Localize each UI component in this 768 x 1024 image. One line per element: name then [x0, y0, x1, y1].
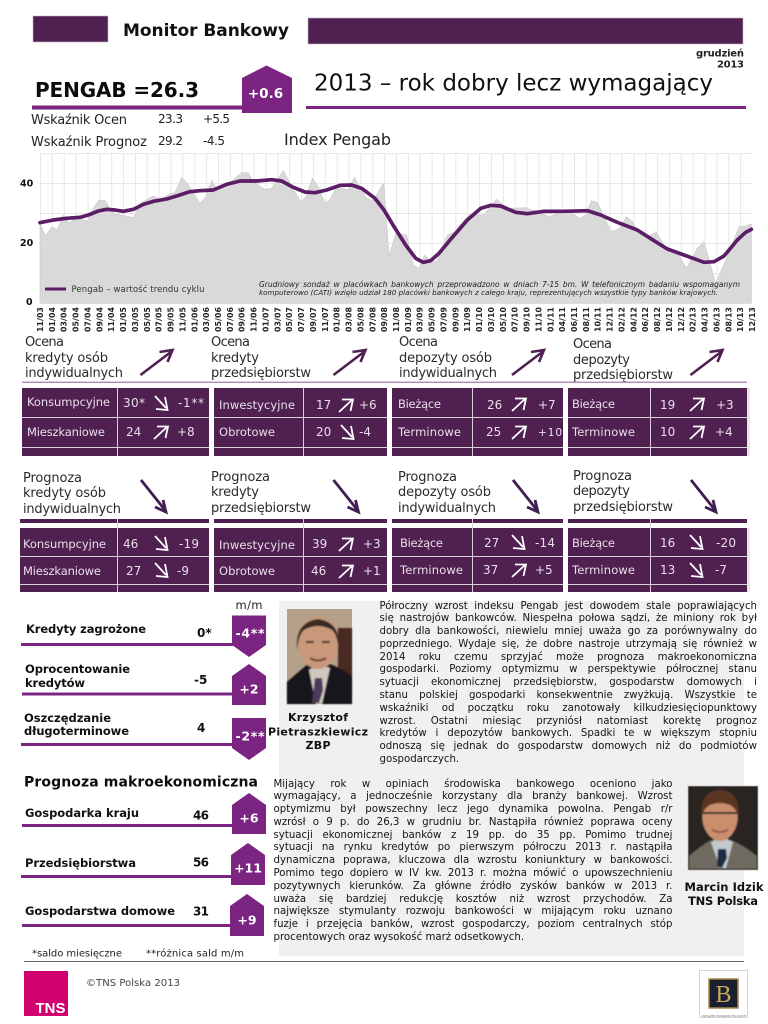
logo: Związek Banków Polskich: ZWIĄZEK BANKÓW POLSKICH: [702, 1013, 746, 1018]
commentary text: ZBP: poprzedniego. Wydaje się, że dobre nastroje utrzymają się również w: [380, 639, 757, 650]
heading: Ocena depozyty przedsiębiorstw: Ocena: [573, 337, 612, 352]
heading: Ocena depozyty osób indywidualnych: depozyty osób: [399, 351, 492, 366]
x axis labels: 01/05: [119, 307, 128, 332]
label: m/m: m/m: [236, 598, 262, 612]
sub-indicators table: 29.2: [158, 134, 183, 148]
table: ocena depozyty osób: 26: [487, 398, 502, 412]
commentary text: ZBP: się nastrojów bankowców. Niespełna połowa sądzi, że miniony rok był: [380, 613, 757, 624]
heading: Prognoza kredyty osób indywidualnych: [23, 471, 121, 517]
x axis labels: 11/08: [392, 307, 401, 332]
survey note: komputerowo (CATI) wzięło udział 180 placówki bankowych z całego kraju, reprezentujących wszystkie typy banków krajowych.: [259, 288, 718, 297]
table: prognoza depozyty przedsiębiorstw: -7: [715, 563, 727, 577]
indicator: Oszczędzanie długoterminowe: długoterminowe: [24, 724, 129, 738]
table: ocena depozyty osób: [392, 388, 563, 456]
x axis labels: 03/07: [273, 307, 282, 332]
heading: Prognoza depozyty osób indywidualnych: [398, 470, 496, 516]
commentary text: TNS: optymizmu był powszechny lecz jego dynamika powolna. Pengab r/r: [274, 804, 672, 815]
copyright: ©TNS Polska 2013: [86, 978, 180, 989]
x axis labels: 10/12: [665, 307, 674, 332]
table: ocena kredyty osób: Konsumpcyjne: [27, 395, 110, 409]
indicator: Przedsiębiorstwa: Przedsiębiorstwa: [25, 856, 136, 870]
commentary text: TNS: procentowych oraz wysokość marż odsetkowych.: [274, 932, 524, 943]
table: ocena depozyty przedsiębiorstw: Terminowe: [571, 425, 635, 439]
table: ocena kredyty przedsiębiorstw: 20: [316, 425, 331, 439]
indicator: Oszczędzanie długoterminowe: Oszczędzanie: [24, 711, 111, 725]
heading: Prognoza kredyty osób indywidualnych: indywidualnych: [23, 502, 121, 517]
heading: Prognoza depozyty przedsiębiorstw: Prognoza: [573, 469, 632, 484]
heading: Ocena kredyty osób indywidualnych: kredyty osób: [25, 351, 108, 366]
x axis labels: 03/05: [131, 307, 140, 332]
photo: Krzysztof Pietraszkiewicz: [287, 609, 352, 704]
x axis labels: 04/13: [700, 307, 710, 332]
x axis labels: 09/04: [95, 306, 104, 332]
commentary text: ZBP: 2014 roku czemu sprzyjać może prognoza makroekonomiczna: [380, 652, 757, 663]
x axis labels: 01/04: [48, 306, 57, 332]
heading: Prognoza depozyty osób indywidualnych: depozyty osób: [398, 485, 491, 500]
table: prognoza kredyty przedsiębiorstw: Inwestycyjne: [219, 538, 295, 552]
heading: Prognoza kredyty przedsiębiorstw: kredyty: [211, 485, 259, 500]
commentary text: ZBP: odnoszą się jednak do gospodarstw domowych niż do podmiotów: [380, 741, 757, 752]
x axis labels: 03/10: [487, 306, 496, 332]
x axis labels: 01/07: [262, 307, 270, 332]
x axis labels: 06/11: [570, 307, 579, 332]
table: prognoza kredyty przedsiębiorstw: 39: [312, 537, 327, 551]
indicator: Oprocentowanie kredytów: kredytów: [25, 676, 85, 690]
commentary text: TNS: Mijający rok w opiniach środowiska bankowego oceniono jako: [274, 778, 672, 790]
heading: Prognoza kredyty przedsiębiorstw: przedsiębiorstw: [211, 501, 311, 516]
table: prognoza depozyty osób: Terminowe: [399, 563, 463, 577]
indicator: Oprocentowanie kredytów: -5: [194, 673, 207, 687]
heading: Ocena depozyty przedsiębiorstw: depozyty: [573, 353, 630, 368]
heading: Prognoza depozyty przedsiębiorstw: [573, 469, 673, 515]
x axis labels: 11/07: [321, 307, 330, 332]
sub-indicators table: +5.5: [203, 112, 230, 126]
table: ocena kredyty osób: -1**: [178, 396, 204, 410]
indicator: Gospodarka kraju: 46: [193, 808, 209, 822]
commentary text: ZBP: wskaźniki od początku roku zanotowały kilkudziesięciopunktowy: [380, 703, 757, 714]
table: prognoza kredyty przedsiębiorstw: +3: [363, 537, 381, 551]
indicator: Gospodarka kraju: Gospodarka kraju: [25, 806, 139, 820]
heading: Prognoza kredyty osób indywidualnych: Prognoza: [23, 471, 82, 486]
table: prognoza kredyty osób: Mieszkaniowe: [23, 564, 101, 578]
badge: PENGAB change +0.6: [242, 66, 292, 113]
table: ocena depozyty przedsiębiorstw: 10: [660, 425, 675, 439]
table: prognoza kredyty przedsiębiorstw: 46: [311, 564, 326, 578]
x axis labels: 04/12: [629, 307, 638, 332]
indicator: Gospodarka kraju: [22, 793, 266, 834]
table: prognoza depozyty osób: -14: [535, 536, 555, 550]
x axis labels: 09/06: [238, 307, 247, 332]
x axis labels: 03/06: [202, 307, 211, 332]
heading: Ocena depozyty przedsiębiorstw: [573, 337, 673, 383]
chart heading: Index Pengab: [284, 130, 391, 149]
caption: Marcin Idzik TNS Polska: Marcin Idzik: [684, 880, 764, 894]
heading: Prognoza depozyty osób indywidualnych: indywidualnych: [398, 501, 496, 516]
commentary text: TNS: największe stymulanty rozwoju bankowości w mijającym roku uznano: [274, 906, 672, 917]
commentary text: ZBP: sytuacji ekonomicznej przedsiębiorstw, gospodarstw domowych i: [380, 677, 757, 688]
x axis labels: 07/05: [155, 307, 164, 332]
indicator: Gospodarka kraju: +6: [239, 810, 259, 826]
x axis labels: 06/12: [641, 307, 650, 332]
trend line: [40, 180, 751, 262]
table: prognoza kredyty osób: -9: [177, 564, 189, 578]
x axis labels: [36, 306, 757, 332]
x axis labels: 05/06: [214, 307, 223, 332]
indicator: Oprocentowanie kredytów: Oprocentowanie: [25, 662, 130, 676]
table: ocena depozyty przedsiębiorstw: +4: [715, 425, 733, 439]
table: prognoza depozyty przedsiębiorstw: 16: [660, 536, 675, 550]
arrow up: depozyty osób: [512, 350, 544, 375]
x axis labels: 05/10: [499, 306, 508, 332]
table: prognoza kredyty osób: 46: [123, 537, 138, 551]
heading: Ocena depozyty przedsiębiorstw: przedsiębiorstw: [573, 368, 673, 383]
x axis labels: 11/05: [178, 307, 187, 332]
x axis labels: 04/11: [558, 307, 567, 332]
indicator: Kredyty zagrożone: Kredyty zagrożone: [26, 622, 146, 636]
indicator: Przedsiębiorstwa: +11: [234, 860, 262, 876]
table: ocena kredyty osób: Mieszkaniowe: [27, 425, 105, 439]
sub-indicators table: -4.5: [203, 134, 225, 148]
indicator: Gospodarstwa domowe: [22, 894, 264, 936]
table: ocena kredyty przedsiębiorstw: [214, 388, 387, 456]
heading: Ocena kredyty przedsiębiorstw: kredyty: [211, 351, 259, 366]
table: ocena depozyty osób: Terminowe: [397, 425, 461, 439]
x axis labels: 05/07: [285, 307, 294, 332]
sub-indicators table: Wskaźnik Ocen: [31, 113, 127, 128]
table: ocena kredyty przedsiębiorstw: 17: [316, 398, 331, 412]
logo: TNS: [24, 971, 68, 1017]
heading: Ocena depozyty osób indywidualnych: Ocena: [399, 335, 438, 350]
arrow down: depozyty osób: [513, 480, 538, 512]
table: prognoza depozyty przedsiębiorstw: Bieżące: [572, 536, 615, 550]
table: prognoza kredyty przedsiębiorstw: [214, 519, 387, 592]
indicator: Oszczędzanie długoterminowe: [21, 711, 266, 760]
x axis labels: 03/09: [416, 307, 425, 332]
heading: Prognoza kredyty przedsiębiorstw: Prognoza: [211, 470, 270, 485]
heading: Prognoza depozyty przedsiębiorstw: depozyty: [573, 484, 630, 499]
commentary text: ZBP: stanu polskiej gospodarki konsekwentnie zwyżkują. Wszystkie te: [380, 690, 757, 701]
commentary text: TNS: dynamiczna poprawa, kluczowa dla wzrostu koniunktury w bankowości.: [274, 855, 672, 866]
x axis labels: 05/08: [356, 307, 365, 332]
photo: Marcin Idzik: [688, 786, 758, 870]
x axis labels: 01/06: [190, 307, 199, 332]
table: prognoza depozyty osób: [392, 519, 563, 592]
header title: Monitor Bankowy: Monitor Bankowy: [123, 21, 289, 41]
commentary text: ZBP: kredytów i depozytów bankowych. Spadki te w większym stopniu: [380, 728, 757, 739]
x axis labels: 01/11: [546, 307, 555, 332]
logo: Związek Banków Polskich: B: [715, 982, 732, 1008]
x axis labels: 08/11: [582, 307, 591, 332]
table: ocena depozyty osób: 25: [486, 425, 501, 439]
table: ocena kredyty przedsiębiorstw: Inwestycyjne: [219, 398, 295, 412]
indicator: Oprocentowanie kredytów: +2: [239, 682, 259, 696]
table: prognoza depozyty przedsiębiorstw: [568, 519, 750, 592]
heading: Ocena kredyty przedsiębiorstw: przedsiębiorstw: [211, 366, 311, 381]
main title: [306, 70, 746, 109]
indicator: Oszczędzanie długoterminowe: -2**: [236, 728, 265, 744]
x axis labels: 11/03: [36, 307, 45, 332]
caption: Marcin Idzik TNS Polska: TNS Polska: [688, 894, 758, 908]
x axis labels: 05/04: [72, 306, 81, 332]
table: ocena depozyty przedsiębiorstw: +3: [716, 398, 734, 412]
x axis labels: 07/04: [84, 306, 92, 332]
footer rule: [24, 961, 744, 962]
table: prognoza depozyty osób: +5: [535, 563, 553, 577]
heading: Ocena kredyty osób indywidualnych: indywidualnych: [25, 366, 123, 381]
survey note: [259, 280, 740, 297]
commentary text: ZBP: wzrost. Ostatni miesiąc przyniósł natomiast korektę prognoz: [380, 716, 757, 727]
heading: Ocena kredyty przedsiębiorstw: Ocena: [211, 335, 250, 350]
table: ocena kredyty przedsiębiorstw: +6: [359, 398, 377, 412]
arrow down: kredyty osób: [141, 480, 166, 512]
table: ocena kredyty przedsiębiorstw: -4: [359, 425, 371, 439]
heading: Prognoza kredyty osób indywidualnych: kredyty osób: [23, 486, 106, 501]
commentary text: TNS: sytuacji na rynku kredytów po pierwszym półroczu 2013 r. nastąpiła: [274, 842, 672, 853]
sub-indicators table: 23.3: [158, 112, 183, 126]
table: prognoza kredyty przedsiębiorstw: Obrotowe: [219, 564, 275, 578]
indicator: Kredyty zagrożone: -4**: [236, 626, 265, 640]
main title: 2013 – rok dobry lecz wymagający: [314, 70, 713, 96]
x axis labels: 07/08: [368, 307, 377, 332]
table: ocena kredyty osób: [22, 388, 209, 456]
indicator: Kredyty zagrożone: [21, 616, 266, 657]
x axis labels: 11/04: [107, 306, 116, 332]
table: ocena kredyty przedsiębiorstw: Obrotowe: [219, 425, 275, 439]
indicator: Oprocentowanie kredytów: [22, 662, 266, 705]
y axis labels: 20: [20, 238, 34, 249]
indicator: Gospodarstwa domowe: 31: [193, 904, 209, 918]
indicator: Oszczędzanie długoterminowe: 4: [197, 721, 205, 735]
heading: Ocena kredyty osób indywidualnych: [25, 335, 123, 381]
issue date: [696, 48, 744, 70]
table: prognoza depozyty osób: 27: [484, 536, 499, 550]
x axis labels: 07/07: [297, 307, 306, 332]
commentary text: TNS: wymagający, a jednocześnie korzystany dla branży bankowej. Wzrost: [274, 791, 672, 802]
table: prognoza depozyty osób: 37: [483, 563, 498, 577]
table: ocena kredyty osób: 30*: [123, 396, 145, 410]
heading: Prognoza depozyty przedsiębiorstw: przedsiębiorstw: [573, 500, 673, 515]
table: ocena kredyty osób: 24: [126, 425, 141, 439]
x axis labels: 06/13: [712, 307, 721, 332]
x axis labels: 01/10: [475, 306, 484, 332]
x axis labels: 09/07: [309, 307, 318, 332]
x axis labels: 09/05: [166, 307, 176, 332]
commentary text: ZBP: Półroczny wzrost indeksu Pengab jest dowodem stale poprawiających: [380, 600, 757, 612]
x axis labels: 02/12: [618, 307, 626, 332]
caption: Krzysztof Pietraszkiewicz ZBP: Krzysztof: [288, 711, 348, 724]
heading: Ocena depozyty osób indywidualnych: [399, 335, 497, 381]
table: ocena depozyty przedsiębiorstw: [568, 388, 750, 456]
chart: Index Pengab: [20, 153, 757, 332]
table: ocena kredyty osób: +8: [177, 425, 195, 439]
table: prognoza depozyty przedsiębiorstw: -20: [716, 536, 736, 550]
x axis labels: 09/09: [451, 307, 460, 332]
arrow up: kredyty osób: [140, 350, 172, 375]
x axis labels: 09/10: [522, 306, 532, 332]
sub-indicators table: [31, 112, 230, 150]
y axis labels: [20, 178, 34, 308]
commentary text: ZBP: gospodarczych.: [380, 754, 459, 765]
table: ocena depozyty osób: +10: [538, 427, 562, 439]
indicator: Gospodarstwa domowe: +9: [237, 912, 257, 928]
table: prognoza kredyty przedsiębiorstw: +1: [363, 564, 381, 578]
caption: Krzysztof Pietraszkiewicz ZBP: ZBP: [306, 739, 330, 752]
arrow up: kredyty przedsiębiorstw: [334, 350, 366, 375]
indicator: Kredyty zagrożone: 0*: [197, 626, 212, 640]
commentary text: TNS: [274, 778, 672, 943]
table: ocena depozyty osób: +7: [538, 398, 556, 412]
table: prognoza depozyty przedsiębiorstw: Terminowe: [571, 563, 635, 577]
issue date: grudzień: [696, 48, 744, 60]
legend: Pengab – wartość trendu cyklu: [72, 284, 204, 295]
grey area series: [40, 171, 751, 303]
x axis labels: 05/05: [143, 307, 152, 332]
survey note: Grudniowy sondaż w placówkach bankowych przeprowadzono w dniach 7-15 bm. W telefonicznym badaniu wspomaganym: [259, 280, 740, 289]
heading: Ocena kredyty osób indywidualnych: Ocena: [25, 335, 64, 350]
commentary text: ZBP: gospodarki. Poziomy optymizmu w perspektywie półrocznej stanu: [380, 664, 757, 675]
footnotes: **różnica sald m/m: [146, 948, 244, 960]
arrow up: depozyty przedsiębiorstw: [690, 350, 722, 375]
x axis labels: 02/13: [689, 307, 698, 332]
table: ocena depozyty przedsiębiorstw: 19: [660, 398, 675, 412]
commentary text: TNS: uważa się bardziej redukcję kosztów niż wzrost przychodów. Za: [274, 894, 672, 905]
table: prognoza kredyty osób: [20, 519, 209, 592]
commentary text: ZBP: dobry dla bankowości, niewielu mniej uważa go za porównywalny do: [380, 626, 757, 637]
table: prognoza kredyty osób: 27: [126, 564, 141, 578]
x axis labels: 08/12: [653, 307, 662, 332]
x axis labels: 11/10: [534, 306, 543, 332]
y axis labels: 40: [20, 178, 34, 190]
PENGAB headline value: [32, 78, 243, 110]
chart grid: [40, 153, 752, 303]
header band left: [33, 16, 108, 42]
x axis labels: 01/08: [333, 307, 342, 332]
x axis labels: 01/09: [404, 307, 413, 332]
x axis labels: 07/10: [511, 306, 520, 332]
table: prognoza kredyty osób: -19: [179, 537, 199, 551]
commentary text: TNS: wzrósł o 9 p. do 26,3 w grudniu br. Nastąpiła również poprawa oceny: [274, 817, 672, 828]
x axis labels: 11/09: [463, 307, 472, 332]
indicator: Przedsiębiorstwa: 56: [193, 856, 209, 870]
x axis labels: 10/11: [594, 307, 603, 332]
footnotes: *saldo miesięczne: [32, 948, 122, 960]
commentary text: TNS: fuzje i przejęcia banków, wzrost gospodarczy, poziom centralnych stóp: [274, 919, 672, 930]
heading: Prognoza makroekonomiczna: Prognoza makroekonomiczna: [24, 774, 258, 790]
x axis labels: 11/06: [250, 307, 259, 332]
table: ocena depozyty osób: Bieżące: [398, 397, 441, 411]
table: prognoza depozyty przedsiębiorstw: 13: [660, 563, 675, 577]
x axis labels: 05/09: [428, 307, 437, 332]
issue date: 2013: [717, 60, 744, 70]
arrow down: depozyty przedsiębiorstw: [691, 480, 716, 512]
x axis labels: 08/13: [724, 307, 733, 332]
x axis labels: 12/11: [606, 307, 615, 332]
heading: Ocena depozyty osób indywidualnych: indywidualnych: [399, 366, 497, 381]
commentary text: ZBP: [380, 600, 757, 765]
table: prognoza kredyty osób: Konsumpcyjne: [23, 537, 106, 551]
commentary panel background: [279, 601, 744, 956]
x axis labels: 12/12: [677, 307, 686, 332]
caption: Marcin Idzik TNS Polska: [684, 880, 764, 908]
x axis labels: 03/04: [60, 306, 69, 332]
logo: TNS: TNS: [36, 1000, 66, 1017]
indicator: Przedsiębiorstwa: [21, 843, 265, 885]
commentary text: TNS: Pomimo tego dopiero w IV kw. 2013 r. można mówić o upowszechnieniu: [274, 868, 672, 879]
commentary text: TNS: sytuacji ekonomicznej banków z 19 pp. do 35 pp. Pomimo trudnej: [274, 830, 672, 841]
sub-indicators table: Wskaźnik Prognoz: [31, 135, 147, 150]
indicator: Gospodarstwa domowe: Gospodarstwa domowe: [25, 904, 175, 918]
table: prognoza depozyty osób: Bieżące: [400, 536, 443, 550]
divider under assessment headings: [22, 382, 747, 383]
x axis labels: 12/13: [748, 307, 757, 332]
caption: Krzysztof Pietraszkiewicz ZBP: Pietraszkiewicz: [268, 726, 368, 738]
arrow down: kredyty przedsiębiorstw: [334, 480, 358, 512]
caption: Krzysztof Pietraszkiewicz ZBP: [268, 711, 368, 752]
x axis labels: 03/08: [344, 307, 354, 332]
x axis labels: 07/09: [440, 307, 448, 332]
table: ocena depozyty przedsiębiorstw: Bieżące: [572, 397, 615, 411]
heading: Ocena kredyty przedsiębiorstw: [211, 335, 311, 381]
y axis labels: 0: [26, 297, 33, 308]
logo: Związek Banków Polskich: [700, 970, 748, 1018]
PENGAB headline value: PENGAB =26.3: [35, 78, 199, 102]
header band right: [308, 18, 743, 44]
x axis labels: 07/06: [226, 307, 235, 332]
heading: Prognoza kredyty przedsiębiorstw: [211, 470, 311, 516]
heading: Prognoza depozyty osób indywidualnych: Prognoza: [398, 470, 457, 485]
badge: PENGAB change +0.6: +0.6: [248, 86, 283, 102]
x axis labels: 09/08: [380, 307, 389, 332]
footnotes: [32, 948, 244, 960]
x axis labels: 10/13: [736, 307, 745, 332]
commentary text: TNS: pozytywnych kierunków. Za główne źródło zysków banków w 2013 r.: [274, 881, 672, 892]
